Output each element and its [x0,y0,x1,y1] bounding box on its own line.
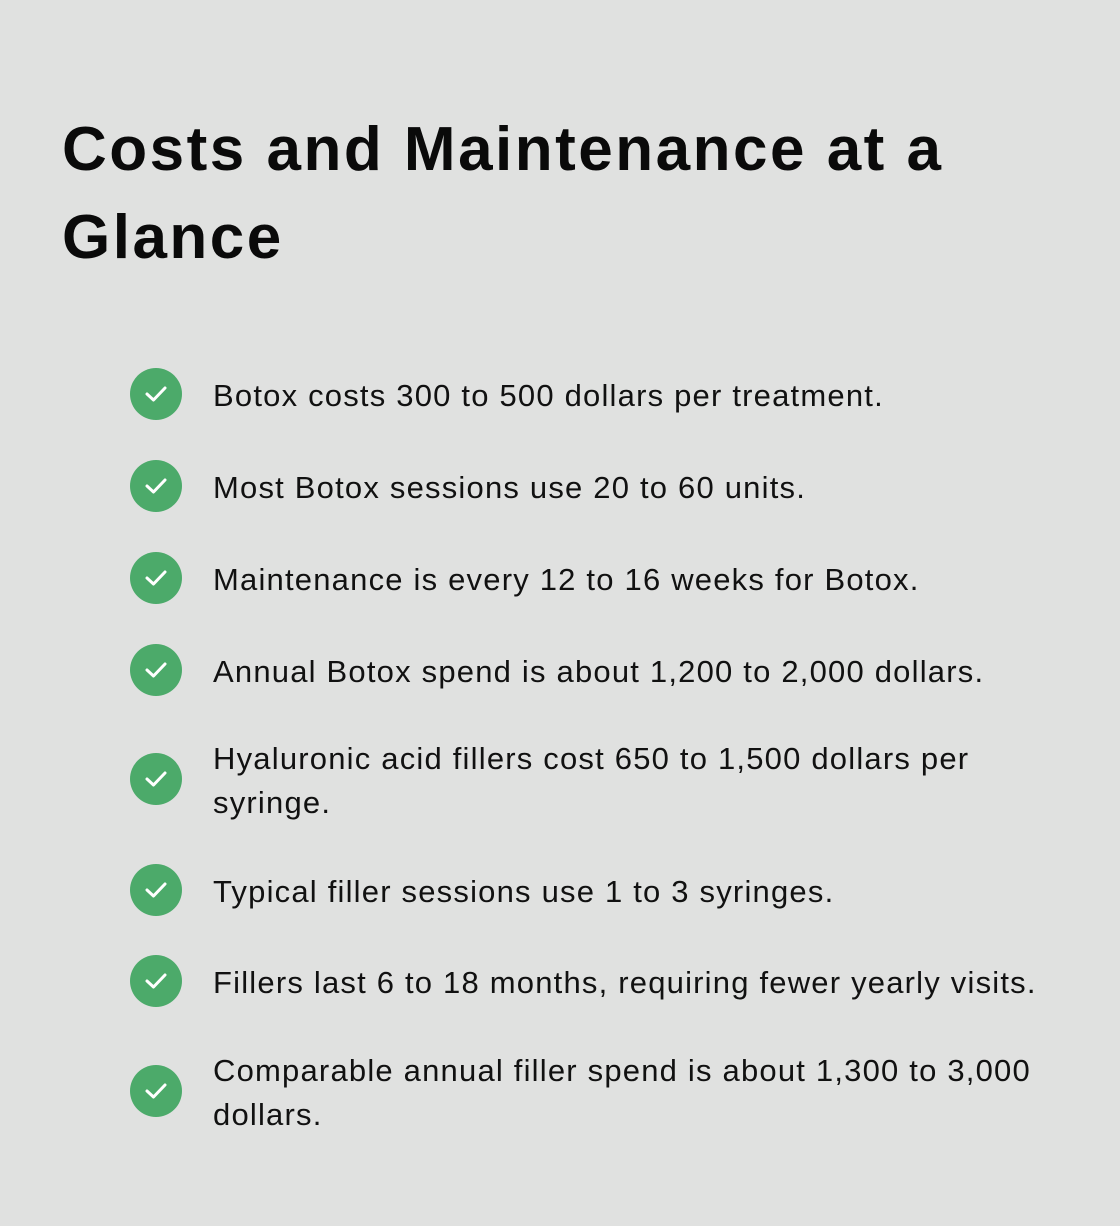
item: annual filler: dollars. [213,1097,323,1132]
title: Glance [62,203,284,272]
item: annual botox: Annual Botox spend is about 1,200 to 2,000 dollars. [213,654,984,689]
item: annual botox [130,644,984,696]
icon: check [130,1065,182,1117]
title: Costs and Maintenance at a [62,115,944,184]
title [62,115,944,272]
icon: check [130,753,182,805]
item: units [130,460,806,512]
item: maintenance [130,552,920,604]
icon: check [130,644,182,696]
icon: check [130,552,182,604]
icon: check [130,368,182,420]
item: filler duration: Fillers last 6 to 18 months, requiring fewer yearly visits. [213,965,1037,1000]
item: annual filler [130,1053,1031,1132]
item: maintenance: Maintenance is every 12 to 16 weeks for Botox. [213,562,920,597]
item: units: Most Botox sessions use 20 to 60 units. [213,470,806,505]
icon: check [130,460,182,512]
icon: check [130,955,182,1007]
item: filler cost: Hyaluronic acid fillers cost 650 to 1,500 dollars per [213,741,969,776]
item: syringes [130,864,834,916]
item: filler cost [130,741,969,820]
item: annual filler: Comparable annual filler spend is about 1,300 to 3,000 [213,1053,1031,1088]
icon: check [130,864,182,916]
item: botox cost: Botox costs 300 to 500 dollars per treatment. [213,378,884,413]
item: syringes: Typical filler sessions use 1 to 3 syringes. [213,874,834,909]
item: botox cost [130,368,884,420]
item: filler cost: syringe. [213,785,331,820]
item: filler duration [130,955,1037,1007]
